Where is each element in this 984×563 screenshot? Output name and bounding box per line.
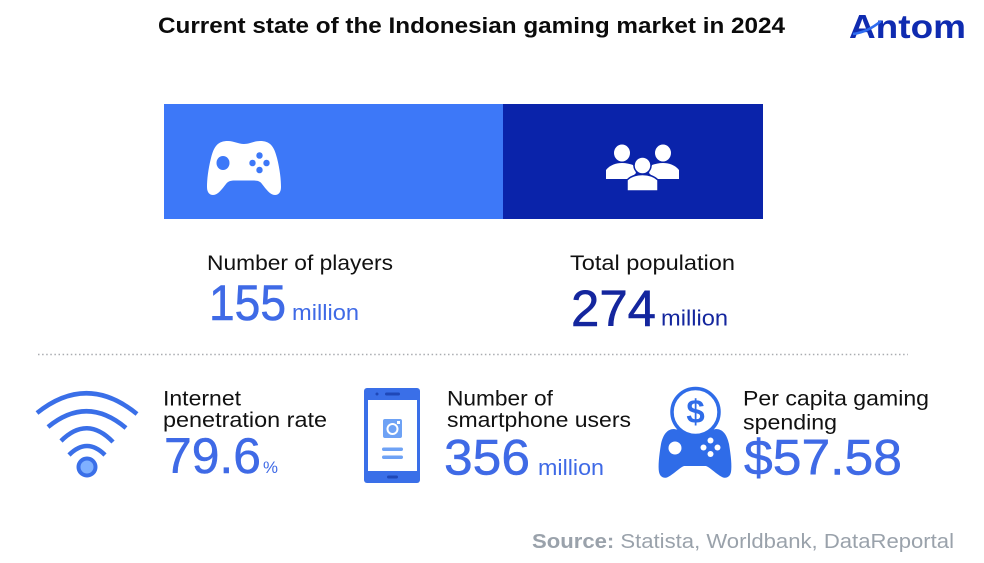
stat: number of players: Number of players — [207, 252, 393, 275]
stat: total population: 274 — [571, 280, 656, 337]
source note: Source: Statista, Worldbank, DataReportal — [532, 530, 954, 553]
stat: per capita gaming spending: Per capita gaming — [743, 388, 929, 410]
stat: number of players — [207, 252, 393, 331]
population segment — [503, 104, 763, 219]
stat: per capita gaming spending: $57.58 — [744, 430, 902, 486]
stat: number of players: million — [292, 300, 359, 325]
stat: internet penetration rate: Internet — [163, 388, 241, 410]
stat: internet penetration rate: penetration rate — [163, 409, 327, 432]
stat: smartphone users: Number of — [447, 388, 553, 410]
stat: number of players: 155 — [209, 275, 286, 331]
stat: smartphone users — [444, 388, 631, 486]
icon: group of people — [606, 144, 679, 191]
stat: smartphone users: million — [538, 455, 604, 480]
icon: coin and game controller — [659, 388, 731, 478]
icon: game controller — [207, 141, 281, 195]
panel: proportion bar — [164, 104, 763, 219]
stat: smartphone users: 356 — [444, 430, 530, 486]
icon: smartphone — [364, 388, 420, 483]
logo: Antom: Antom — [849, 8, 966, 45]
stat: total population — [570, 252, 735, 337]
title: Current state of the Indonesian gaming market in 2024 — [158, 13, 786, 38]
stat: per capita gaming spending — [743, 388, 929, 486]
stat: total population: Total population — [570, 252, 735, 275]
icon: coin and game controller: $ — [686, 393, 705, 430]
stat: total population: million — [661, 306, 728, 330]
players segment — [164, 104, 503, 219]
stat: per capita gaming spending: spending — [743, 412, 837, 434]
stat: internet penetration rate: % — [263, 458, 278, 477]
icon: wifi — [37, 393, 137, 476]
stat: internet penetration rate: 79.6 — [164, 428, 261, 484]
stat: internet penetration rate — [163, 388, 327, 484]
stat: smartphone users: smartphone users — [447, 409, 631, 432]
